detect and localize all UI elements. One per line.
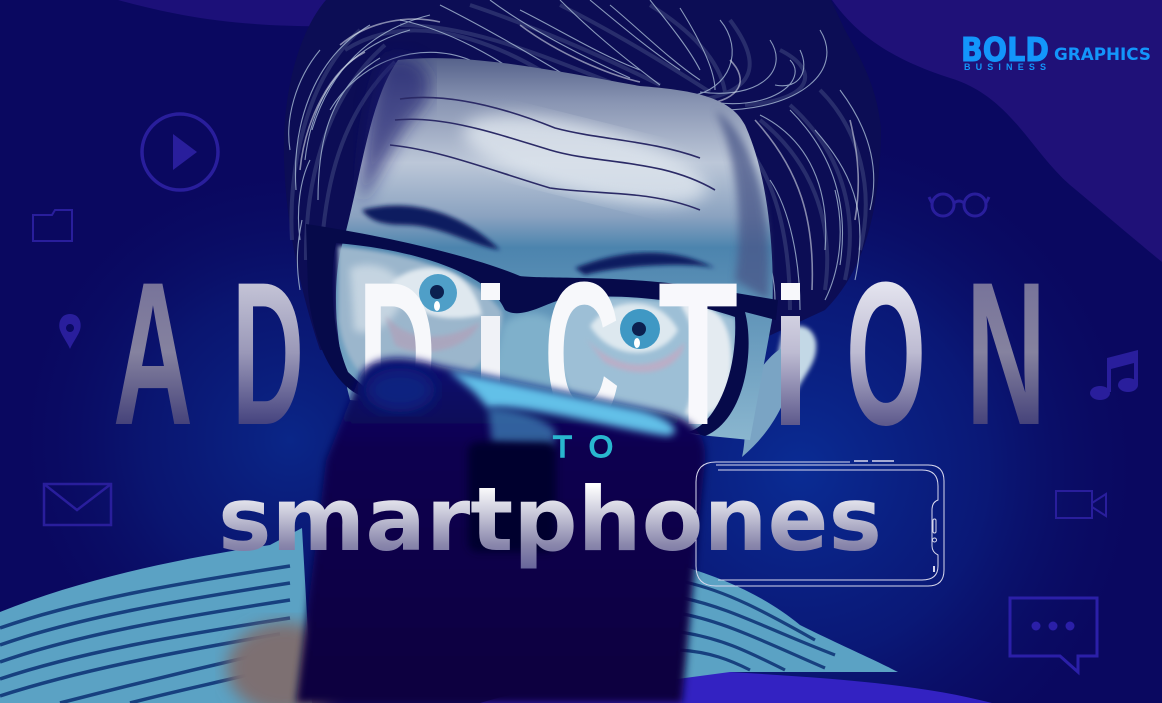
logo: Bold Business Graphics bbox=[961, 30, 1151, 72]
forehead side shadow right bbox=[715, 110, 769, 300]
shirt left bbox=[0, 528, 312, 703]
glasses frame bbox=[306, 224, 778, 436]
forehead wrinkles bbox=[390, 97, 715, 210]
right eye bbox=[585, 303, 685, 372]
icon: play button bbox=[142, 114, 218, 190]
title: ADDICTION: C bbox=[544, 240, 620, 468]
shirt right bbox=[670, 566, 898, 680]
logo: Bold Business Graphics: BOLD bbox=[961, 30, 1049, 69]
phone held in hand bbox=[296, 358, 705, 703]
forehead highlight bbox=[455, 97, 715, 223]
title: ADDICTION: O bbox=[846, 240, 926, 468]
title: ADDICTION: D bbox=[358, 240, 436, 468]
title: ADDICTION: T bbox=[658, 240, 738, 468]
bottom wave shape bbox=[480, 671, 992, 703]
face bbox=[336, 58, 773, 440]
title: ADDICTION: D bbox=[232, 240, 304, 468]
hair highlights bbox=[289, 0, 874, 310]
left lens bbox=[338, 246, 502, 392]
icon: folder bbox=[33, 210, 72, 241]
forehead shadow top-left bbox=[360, 56, 430, 205]
eyebrows bbox=[362, 206, 500, 250]
left eye bbox=[385, 268, 482, 352]
subtitle: TO: T O bbox=[553, 429, 613, 464]
ear bbox=[770, 326, 816, 392]
top right wave shape bbox=[832, 0, 1162, 262]
man illustration bbox=[284, 0, 881, 457]
icon: chat bubble bbox=[1010, 598, 1097, 672]
title: ADDICTION: A bbox=[113, 240, 193, 468]
nose bbox=[490, 313, 566, 425]
title: smartphones: smartphones bbox=[218, 468, 882, 571]
logo: Bold Business Graphics: GRAPHICS bbox=[1054, 45, 1151, 65]
phone outline graphic bbox=[696, 461, 944, 586]
icon: music note bbox=[1090, 350, 1138, 400]
icon: location pin bbox=[59, 314, 81, 349]
right lens bbox=[555, 297, 737, 430]
top left wave shape bbox=[118, 0, 420, 26]
logo: Bold Business Graphics: BUSINESS bbox=[964, 62, 1046, 72]
title: ADDICTION bbox=[113, 240, 1046, 468]
icon: envelope bbox=[44, 484, 111, 525]
icon: video camera bbox=[1056, 491, 1106, 518]
hand bbox=[227, 622, 343, 703]
icon: glasses bbox=[929, 194, 989, 216]
neck hair bbox=[742, 345, 793, 457]
title: ADDICTION: N bbox=[966, 240, 1046, 468]
hair mid-tone strands bbox=[291, 5, 866, 310]
hair bbox=[284, 0, 881, 350]
